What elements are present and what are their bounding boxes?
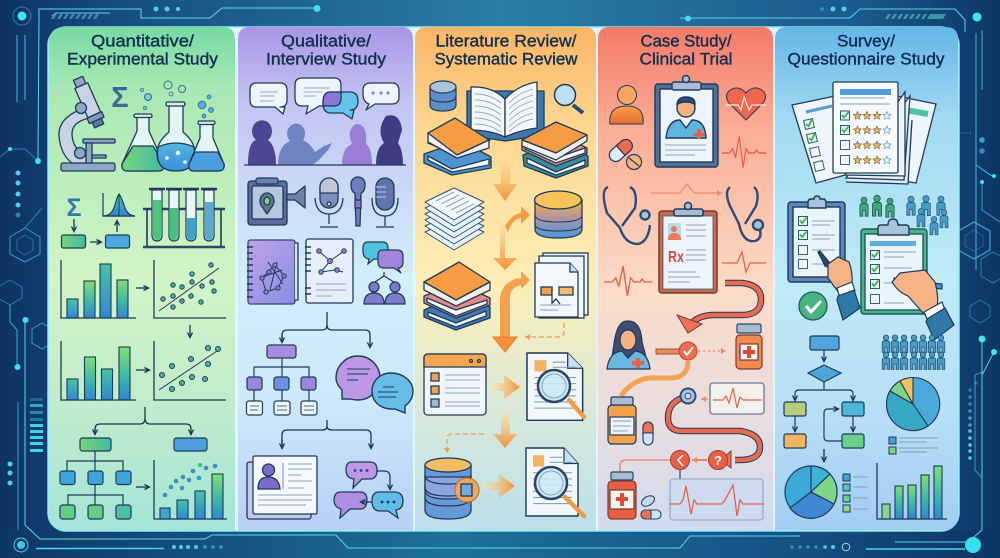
icon: sigma: Σ bbox=[111, 82, 129, 114]
arrow bbox=[281, 440, 283, 448]
icon: hand with pen left bbox=[818, 251, 860, 320]
heading: literature review: Literature Review/ bbox=[436, 32, 577, 51]
arrow bbox=[136, 287, 148, 289]
heading: literature review: Systematic Review bbox=[434, 50, 578, 69]
arrow: s-curve bbox=[668, 398, 760, 468]
connector bbox=[282, 312, 370, 347]
icon: sigma and process bbox=[62, 194, 130, 248]
arrow right bbox=[491, 375, 520, 399]
icon: green group bbox=[860, 195, 894, 217]
icon: document with magnifier bbox=[526, 448, 584, 516]
pie chart 1 bbox=[886, 377, 940, 431]
icon: green flask bbox=[122, 114, 164, 171]
combo chart bbox=[154, 460, 227, 519]
panel: quantitative/experimental study bbox=[49, 27, 235, 530]
icon: pills small bbox=[640, 494, 661, 519]
icon: blue clipboard bbox=[788, 196, 845, 282]
question mark: ? bbox=[714, 453, 722, 468]
icon: red circles bbox=[620, 450, 728, 479]
icon: capsule bbox=[643, 422, 653, 445]
icon: microscope bbox=[59, 75, 115, 171]
icon: check badge bbox=[799, 292, 827, 320]
arrow: curved bidirectional bbox=[500, 271, 530, 340]
heading: case study: Clinical Trial bbox=[640, 50, 732, 69]
panel: survey/questionnaire study bbox=[775, 27, 958, 530]
people silhouettes bbox=[244, 115, 406, 165]
icon: check circle bbox=[679, 342, 697, 360]
heading: quantitative: Quantitative/ bbox=[91, 32, 194, 51]
icon: bottom book stack bbox=[424, 262, 490, 330]
heading: survey: Survey/ bbox=[837, 32, 895, 51]
icon: stethoscope left bbox=[604, 187, 650, 244]
ecg trace bbox=[604, 266, 653, 296]
icon: open book bbox=[467, 82, 544, 141]
icon: documents with selection bbox=[535, 253, 588, 318]
icon: round blue flask bbox=[157, 102, 195, 171]
icon: document with magnifier bbox=[527, 353, 584, 420]
arrow down bbox=[493, 410, 517, 448]
arrow: dashed feedback bbox=[525, 323, 564, 337]
icon: left book stack bbox=[424, 118, 491, 175]
icon: magnifier bbox=[554, 84, 583, 113]
icon: ecg panel bbox=[669, 479, 764, 520]
icon: stethoscope head bbox=[680, 388, 696, 404]
icon: prescription clipboard bbox=[659, 202, 717, 293]
scatter plot 2 bbox=[154, 341, 226, 400]
bottom band bbox=[0, 530, 1000, 558]
heading: quantitative: Experimental Study bbox=[67, 50, 219, 69]
panel: case study/clinical trial bbox=[598, 27, 773, 530]
icon: green clipboard bbox=[861, 219, 927, 314]
arrows: branching flow bbox=[490, 206, 530, 270]
icon: sigma and process: Σ bbox=[66, 194, 82, 222]
circuit decoration: right bbox=[400, 9, 1000, 551]
icon: discussion network bbox=[363, 242, 403, 282]
arrow: dotted bbox=[698, 350, 726, 352]
survey rating rows bbox=[840, 111, 891, 164]
icon: layered database bbox=[534, 191, 582, 238]
org chart bbox=[246, 345, 317, 415]
icon: ecg trace bbox=[722, 136, 766, 167]
arrow bbox=[136, 369, 149, 371]
bar chart bbox=[877, 463, 947, 519]
left tick bars bbox=[30, 398, 43, 452]
icon: bell curve bbox=[103, 193, 135, 216]
icon: purple notebook bbox=[247, 240, 298, 304]
icon: web window bbox=[424, 354, 486, 415]
icon: video camera bbox=[248, 178, 305, 225]
icon: small blue flask bbox=[189, 121, 224, 171]
arrow: dashed feedback bbox=[447, 434, 484, 453]
icon: nurse bbox=[607, 321, 650, 369]
icon: microphones bbox=[315, 177, 398, 227]
icon: speech bubbles bbox=[250, 78, 399, 119]
arrow down bbox=[493, 156, 517, 201]
icon: red medicine bottle bbox=[608, 472, 636, 519]
pie legend 1 bbox=[889, 437, 938, 454]
scatter plot 1 bbox=[154, 260, 226, 318]
legend 2 bbox=[843, 474, 868, 512]
icon: two people bbox=[364, 282, 405, 304]
connector bbox=[95, 407, 191, 434]
arrow: branching red bbox=[651, 184, 722, 193]
icon: patient bbox=[610, 86, 643, 124]
icon: respondent grid bbox=[882, 335, 945, 369]
circuit decoration: left bbox=[0, 5, 400, 552]
connector bbox=[282, 420, 371, 448]
icon: stethoscope right bbox=[727, 187, 763, 241]
icon: blue group bbox=[907, 196, 948, 235]
prescription symbol: Rx bbox=[668, 249, 684, 266]
icon: test tubes bbox=[143, 189, 225, 247]
hierarchy chart bbox=[60, 438, 207, 519]
arrow down bbox=[823, 449, 825, 461]
arrow down bbox=[189, 325, 191, 337]
panel: literature review/systematic review bbox=[415, 27, 596, 530]
panel: qualitative/interview study bbox=[238, 27, 413, 530]
pie chart 2 bbox=[785, 466, 837, 518]
left dots and hatch marks bbox=[8, 6, 223, 549]
heading: case study: Case Study/ bbox=[640, 32, 732, 51]
arrow right bbox=[483, 474, 515, 498]
icon: pill bottle bbox=[608, 397, 636, 444]
arrow down bbox=[493, 337, 517, 352]
ecg trace bbox=[722, 252, 766, 272]
icon: pills bbox=[607, 137, 642, 170]
heading: qualitative: Qualitative/ bbox=[281, 32, 371, 51]
icon: hand with pen right bbox=[892, 270, 954, 340]
icon: chat flow bbox=[334, 462, 403, 518]
heading: survey: Questionnaire Study bbox=[788, 50, 945, 69]
heading: qualitative: Interview Study bbox=[266, 50, 387, 69]
icon: database bbox=[430, 81, 456, 111]
arrow bbox=[281, 336, 283, 342]
icon: white notebook bbox=[305, 239, 353, 303]
icon: database with badge bbox=[425, 458, 479, 519]
arrow bbox=[692, 459, 707, 461]
arrow bbox=[136, 486, 149, 488]
icon: overlapping chat bubbles bbox=[336, 356, 413, 413]
right dots and accents bbox=[790, 6, 981, 553]
icon: medicine bottle bbox=[736, 324, 762, 369]
icon: monitor bbox=[710, 383, 764, 414]
icon: heart bbox=[726, 88, 766, 120]
icon: survey papers bbox=[792, 82, 936, 184]
icon: profile document bbox=[247, 456, 317, 519]
connector bar bbox=[656, 349, 682, 354]
icon: paper stack bbox=[425, 188, 484, 250]
bar chart 1 bbox=[61, 260, 136, 318]
flowchart bbox=[784, 336, 864, 448]
icon: patient clipboard bbox=[655, 76, 718, 167]
curve: orange path bbox=[621, 361, 688, 396]
bar chart 2 bbox=[61, 341, 136, 400]
icon: bubbles bbox=[140, 81, 214, 118]
arrow bbox=[701, 398, 708, 400]
arrow bbox=[94, 429, 96, 434]
icon: right book stack bbox=[522, 122, 588, 178]
arrow: big red curve bbox=[677, 283, 761, 333]
